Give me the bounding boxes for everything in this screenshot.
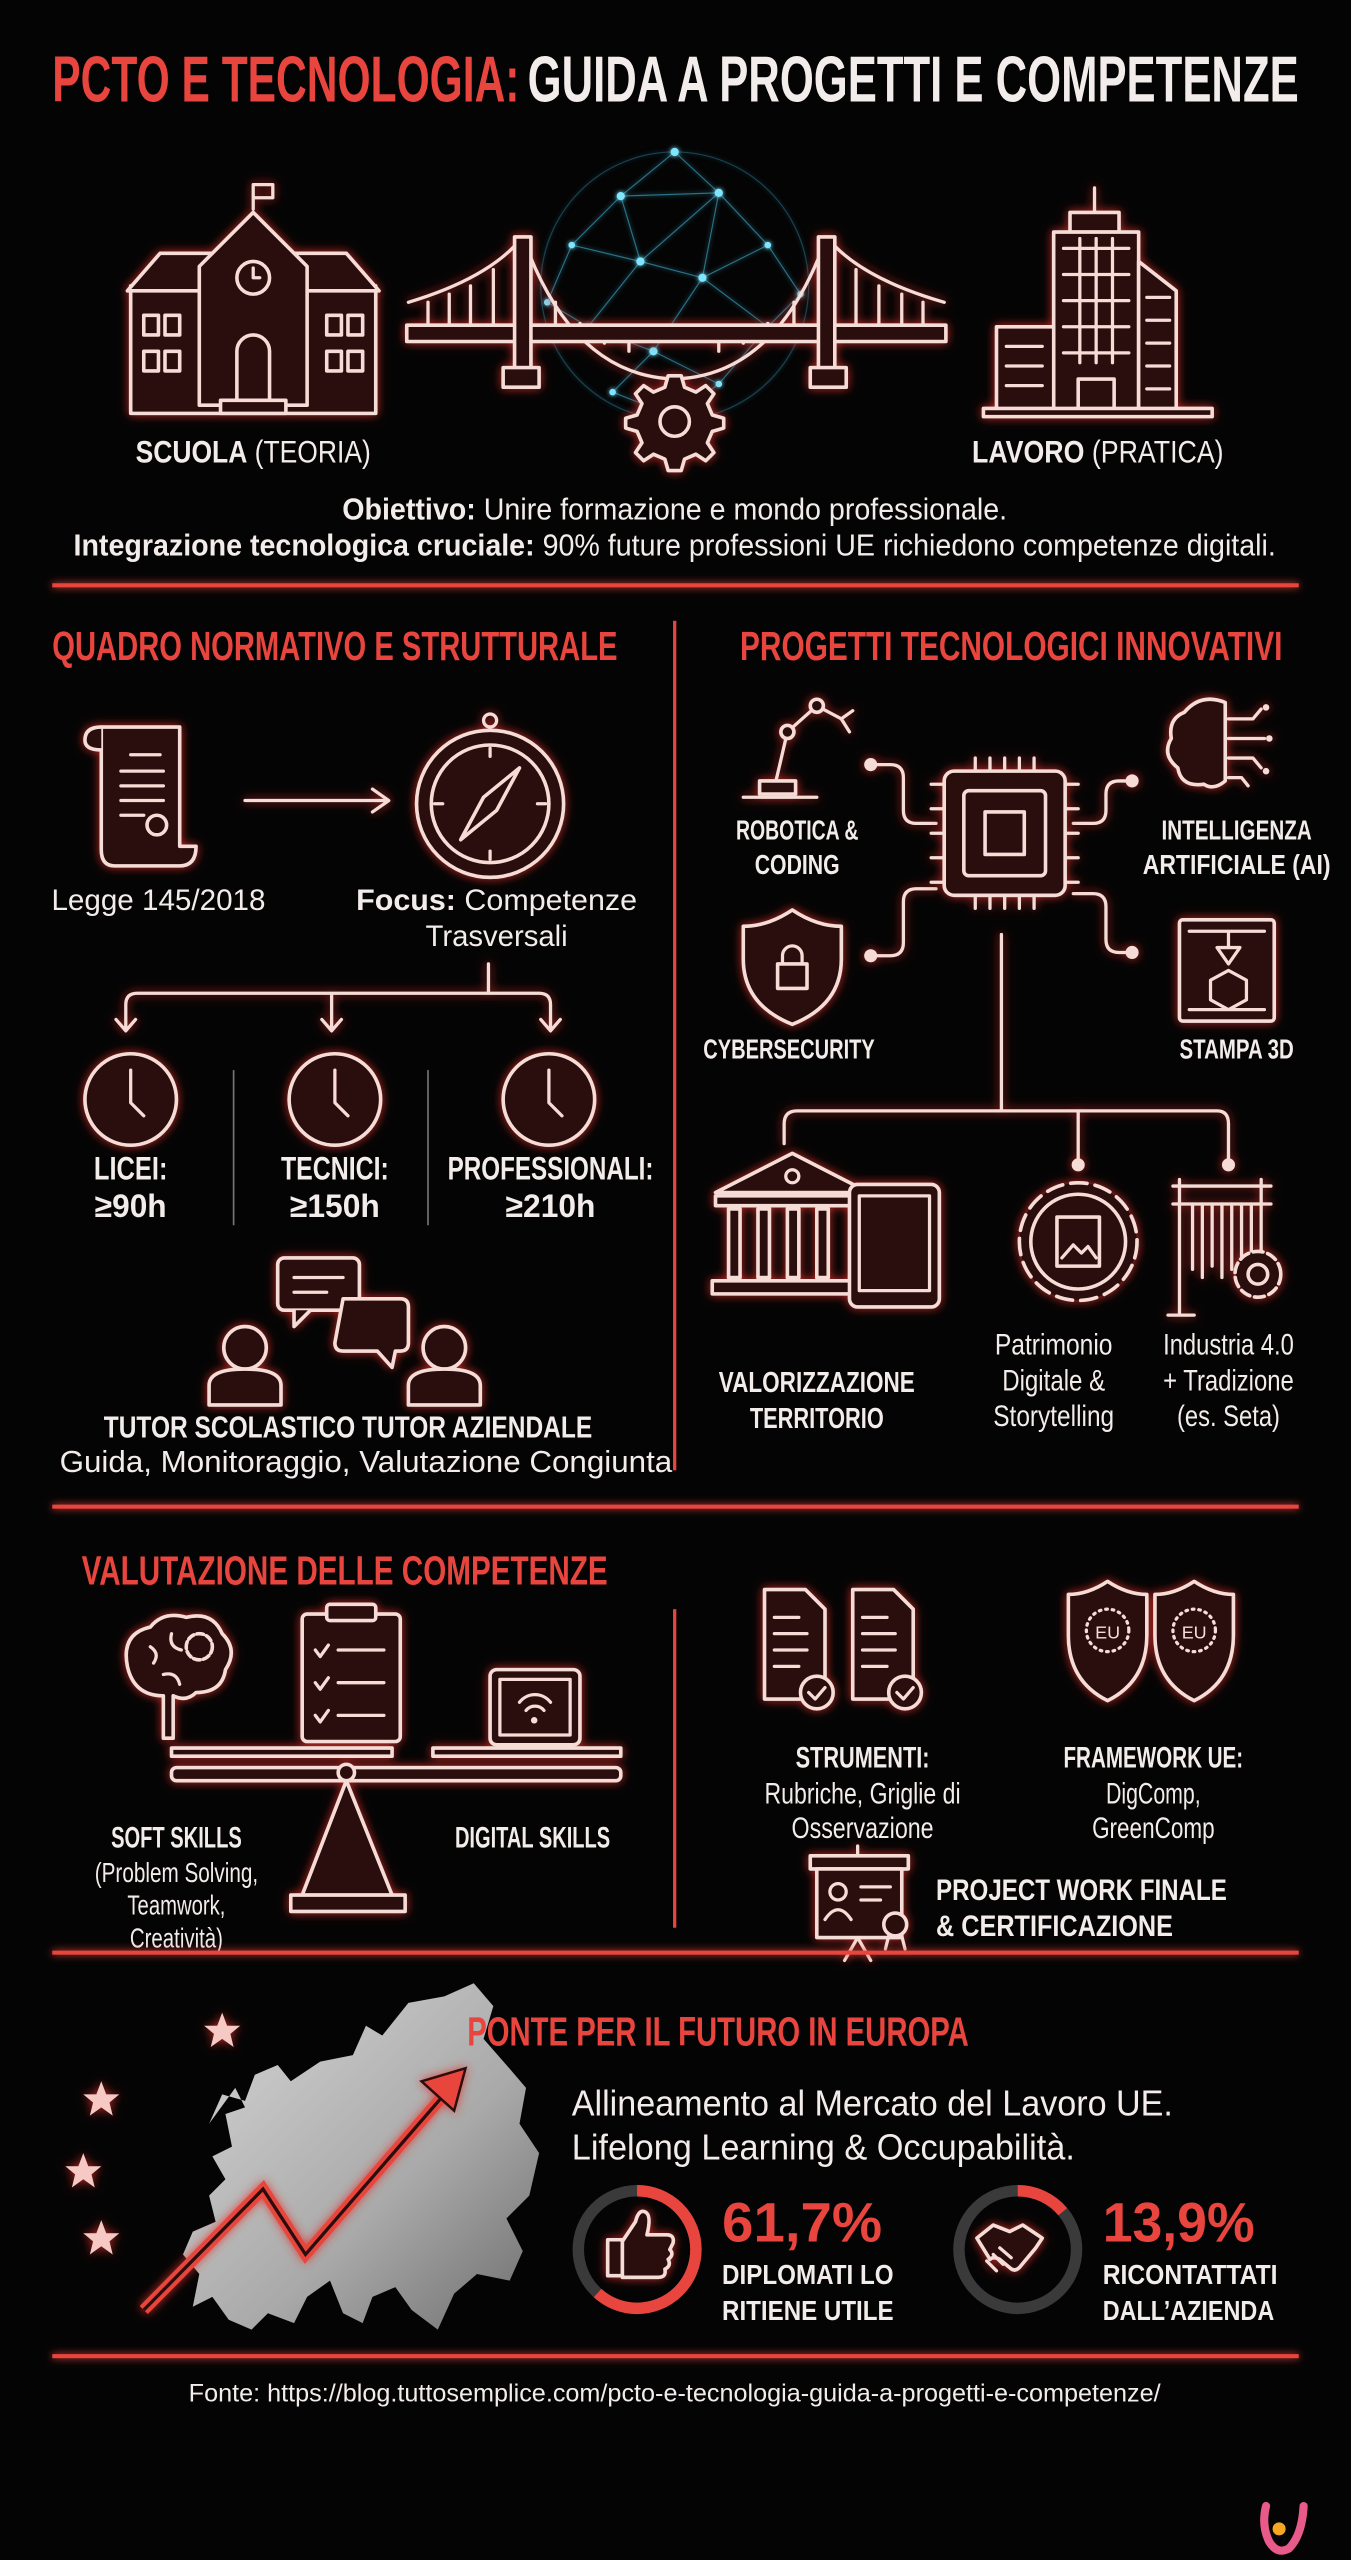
icon: robot arm xyxy=(743,699,853,797)
intro text: Integrazione tecnologica cruciale: 90% future professioni UE richiedono competenze digitali. xyxy=(74,529,1276,562)
icon: ai brain xyxy=(1168,699,1273,787)
label: strumenti: Osservazione xyxy=(791,1812,934,1845)
icon: loom and gear xyxy=(1168,1180,1281,1315)
heading: ponte: PONTE PER IL FUTURO IN EUROPA xyxy=(467,2008,969,2054)
label: framework: FRAMEWORK UE: xyxy=(1063,1742,1243,1775)
panel: strumenti e framework xyxy=(765,1581,1243,1960)
icon: office building xyxy=(983,188,1212,417)
label: industria: Industria 4.0 xyxy=(1163,1328,1294,1361)
icon: museum and tablet xyxy=(712,1153,939,1307)
title xyxy=(52,42,1299,115)
label: framework xyxy=(1063,1742,1243,1845)
text: focus: Trasversali xyxy=(426,920,568,953)
icon: presentation certificate xyxy=(810,1846,908,1960)
text: allineamento: Allineamento al Mercato del Lavoro UE. xyxy=(572,2083,1173,2124)
label: valorizzazione: VALORIZZAZIONE xyxy=(719,1367,915,1399)
label: soft skills: Teamwork, xyxy=(127,1890,225,1921)
label: ai xyxy=(1143,815,1331,880)
label: industria: (es. Seta) xyxy=(1177,1400,1280,1433)
intro text: Obiettivo: Unire formazione e mondo professionale. xyxy=(342,494,1007,527)
icon: balance scale xyxy=(126,1604,621,1911)
logo xyxy=(1264,2506,1304,2551)
icon: shield lock xyxy=(743,910,841,1024)
label: patrimonio: Digitale & xyxy=(1002,1364,1105,1397)
hero: bridge with tech globe xyxy=(407,148,946,471)
stat: 61,7%: 61,7% xyxy=(722,2191,882,2253)
label: strumenti: Rubriche, Griglie di xyxy=(765,1778,961,1811)
hours: tecnici: TECNICI: xyxy=(281,1150,389,1187)
label: patrimonio: Patrimonio xyxy=(995,1328,1112,1361)
stat: 13,9% xyxy=(959,2191,1277,2326)
icon: 3d printer xyxy=(1179,920,1274,1021)
text: tutors xyxy=(60,1412,672,1479)
icon: eu shields xyxy=(1068,1581,1233,1701)
text: legge: Legge 145/2018 xyxy=(51,884,265,917)
label: project work: & CERTIFICAZIONE xyxy=(936,1910,1173,1943)
label: robotica xyxy=(736,815,858,880)
label: framework: GreenComp xyxy=(1092,1812,1215,1845)
label: strumenti: STRUMENTI: xyxy=(796,1742,930,1775)
text: focus xyxy=(356,884,637,953)
icon: eu shields: EU xyxy=(1095,1623,1120,1643)
stat: 61,7%: DIPLOMATI LO xyxy=(722,2259,894,2290)
icon: clocks xyxy=(85,1054,595,1145)
arrow: law to focus xyxy=(245,789,389,812)
hours: licei xyxy=(94,1150,167,1224)
arrow: growth xyxy=(144,2068,466,2310)
heading: quadro normativo: QUADRO NORMATIVO E STRUTTURALE xyxy=(52,623,618,669)
text: tutors: TUTOR SCOLASTICO TUTOR AZIENDALE xyxy=(104,1412,592,1445)
icon: school xyxy=(127,185,379,413)
stars xyxy=(65,2013,240,2254)
panel: quadro normativo xyxy=(51,623,672,1479)
intro text xyxy=(74,494,1276,562)
panel: ponte per il futuro xyxy=(65,1983,1277,2330)
text: focus: Focus: Competenze xyxy=(356,884,637,917)
label: scuola: SCUOLA (TEORIA) xyxy=(136,434,371,469)
text: allineamento xyxy=(572,2083,1173,2168)
label: valorizzazione xyxy=(719,1367,915,1435)
label: robotica: CODING xyxy=(755,849,840,880)
label: soft skills: SOFT SKILLS xyxy=(111,1822,242,1855)
label: lavoro: LAVORO (PRATICA) xyxy=(972,434,1224,469)
label: valorizzazione: TERRITORIO xyxy=(750,1403,884,1435)
icon: eu shields: EU xyxy=(1182,1623,1207,1643)
icon: documents xyxy=(765,1590,921,1709)
label: strumenti xyxy=(765,1742,961,1845)
stat: 61,7%: RITIENE UTILE xyxy=(722,2295,894,2326)
label: industria xyxy=(1163,1328,1294,1433)
label: digital skills: DIGITAL SKILLS xyxy=(455,1822,610,1855)
panel: valutazione xyxy=(82,1548,621,1953)
label: stampa 3d: STAMPA 3D xyxy=(1179,1034,1294,1065)
heading: valutazione: VALUTAZIONE DELLE COMPETENZE xyxy=(82,1548,608,1594)
label: patrimonio xyxy=(993,1328,1114,1433)
icon: law scroll xyxy=(85,727,196,866)
connectors xyxy=(784,758,1235,1171)
hours: licei: LICEI: xyxy=(94,1150,167,1187)
source: Fonte: https://blog.tuttosemplice.com/pcto-e-tecnologia-guida-a-progetti-e-competenze/ xyxy=(189,2379,1162,2407)
stat: 61,7% xyxy=(578,2191,894,2326)
label: industria: + Tradizione xyxy=(1163,1364,1294,1397)
hours: tecnici xyxy=(281,1150,389,1224)
icon: chip xyxy=(931,758,1078,908)
label: patrimonio: Storytelling xyxy=(993,1400,1114,1433)
title: PCTO E TECNOLOGIA: xyxy=(52,42,519,115)
label: cybersecurity: CYBERSECURITY xyxy=(703,1034,875,1065)
icon: europe map xyxy=(183,1983,539,2330)
stat: 13,9%: 13,9% xyxy=(1103,2191,1255,2253)
hours: tecnici: ≥150h xyxy=(290,1187,380,1224)
icon: gear with image xyxy=(1019,1183,1137,1300)
panel: progetti tecnologici xyxy=(703,623,1331,1435)
text: tutors: Guida, Monitoraggio, Valutazione Congiunta xyxy=(60,1446,672,1479)
text: allineamento: Lifelong Learning & Occupabilità. xyxy=(572,2127,1075,2168)
label: project work: PROJECT WORK FINALE xyxy=(936,1874,1227,1907)
label: framework: DigComp, xyxy=(1106,1778,1201,1811)
hours: licei: ≥90h xyxy=(95,1187,167,1224)
hours: professionali: PROFESSIONALI: xyxy=(448,1150,653,1187)
label: soft skills: Creatività) xyxy=(130,1922,223,1953)
hours: professionali: ≥210h xyxy=(506,1187,595,1224)
stat: 13,9%: RICONTATTATI xyxy=(1103,2259,1277,2290)
label: soft skills xyxy=(95,1822,258,1953)
tree arrows to school types xyxy=(116,964,560,1031)
hours: professionali xyxy=(448,1150,653,1224)
label: project work xyxy=(936,1874,1227,1943)
label: robotica: ROBOTICA & xyxy=(736,815,858,846)
stat: 13,9%: DALL’AZIENDA xyxy=(1103,2295,1274,2326)
label: soft skills: (Problem Solving, xyxy=(95,1857,258,1888)
icon: tutors xyxy=(209,1258,480,1405)
icon: compass xyxy=(417,714,564,877)
